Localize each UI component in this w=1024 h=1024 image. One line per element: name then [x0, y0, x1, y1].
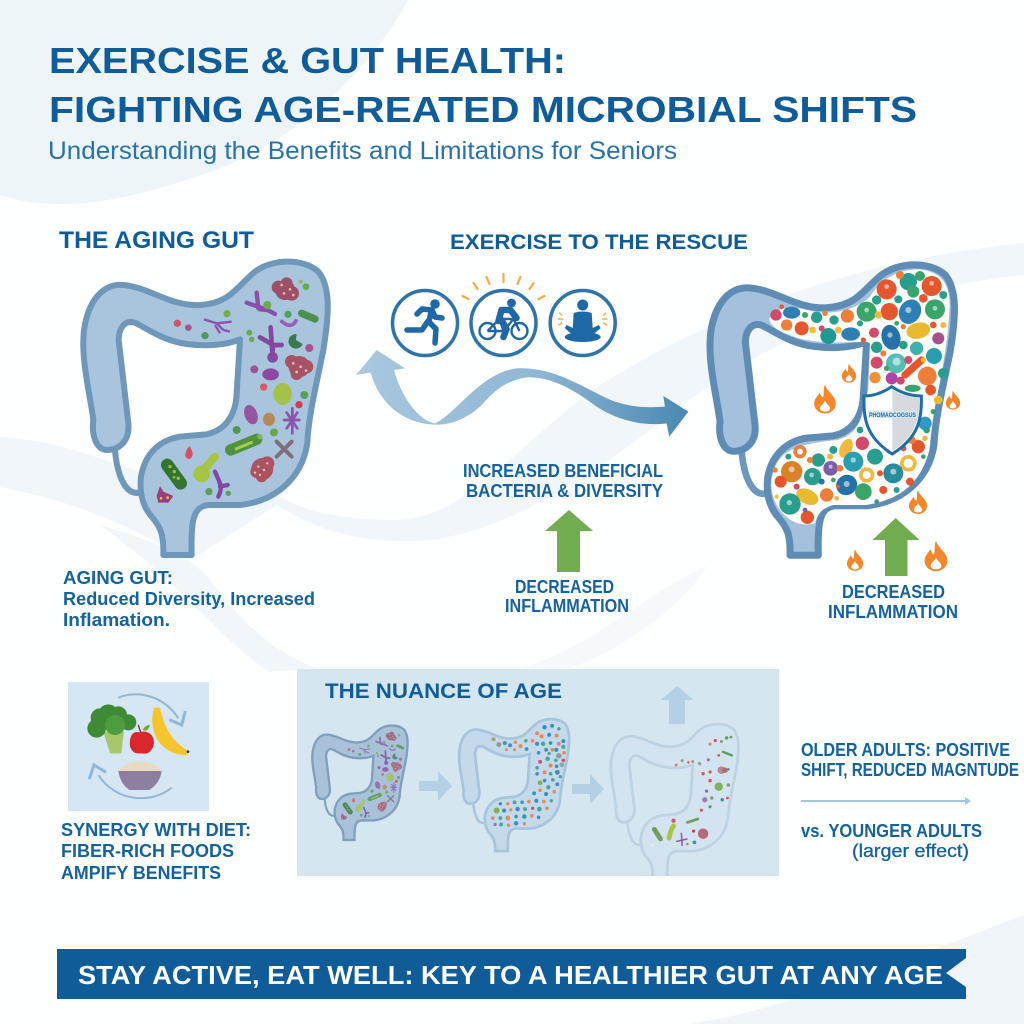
caption: aging gut: Reduced Diversity, Increased — [63, 589, 315, 609]
text: younger adults: vs. YOUNGER ADULTS — [801, 821, 982, 841]
arrow: step one — [419, 771, 452, 801]
arrow: green up centre — [545, 510, 593, 572]
caption: synergy with diet: AMPIFY BENEFITS — [61, 863, 221, 883]
caption: aging gut: AGING GUT: — [63, 568, 173, 588]
caption: aging gut: Inflamation. — [63, 610, 170, 630]
caption: synergy with diet: SYNERGY WITH DIET: — [61, 820, 251, 840]
small gut: aged — [312, 726, 408, 840]
icons: inflammation flames — [814, 363, 960, 571]
title — [49, 40, 917, 130]
arrow: ribbon cycling between guts — [356, 350, 688, 437]
illustration: aging gut with sparse microbes — [83, 262, 328, 555]
caption: aging gut — [63, 568, 315, 630]
caption: synergy with diet — [61, 820, 251, 883]
banner: STAY ACTIVE, EAT WELL: KEY TO A HEALTHIER GUT AT ANY AGE — [78, 960, 943, 990]
arrow: up — [661, 686, 694, 724]
text: younger adults: (larger effect) — [852, 841, 969, 861]
panel: the nuance of age — [297, 669, 779, 877]
arrow: step two — [572, 774, 604, 804]
arrow: green up right — [872, 518, 920, 576]
heading: the aging gut: THE AGING GUT — [59, 227, 254, 254]
title: EXERCISE & GUT HEALTH: — [49, 40, 566, 81]
caption: synergy with diet: FIBER-RICH FOODS — [61, 841, 234, 861]
icon: shield — [864, 387, 921, 454]
text: decreased inflammation right: INFLAMMATION — [828, 602, 958, 622]
text: decreased inflammation right — [828, 582, 958, 622]
subtitle: Understanding the Benefits and Limitations for Seniors — [48, 137, 677, 165]
panel: diet synergy food illustration — [68, 682, 209, 811]
text: increased beneficial bacteria: BACTERIA & DIVERSITY — [466, 481, 663, 501]
extra small microbes filling the gaps — [772, 271, 949, 512]
text: younger adults — [801, 821, 982, 861]
small gut: active — [459, 719, 569, 851]
heading: exercise to the rescue: EXERCISE TO THE RESCUE — [450, 231, 748, 254]
icon: runner — [392, 290, 458, 356]
small gut: faded — [610, 722, 740, 876]
heading: the nuance of age: THE NUANCE OF AGE — [325, 680, 562, 703]
title: FIGHTING AGE-REATED MICROBIAL SHIFTS — [49, 89, 917, 130]
arrow: comparison line — [801, 797, 971, 805]
icon: meditating person — [550, 290, 615, 356]
banner — [57, 949, 966, 999]
text: older adults — [801, 740, 1019, 780]
text: decreased inflammation right: DECREASED — [842, 582, 945, 602]
illustration: healthy gut with diverse microbes — [710, 265, 954, 555]
text: increased beneficial bacteria: INCREASED BENEFICIAL — [463, 461, 663, 481]
icon: shield: PHOMAOCOGSUS — [869, 412, 916, 419]
text: decreased inflammation centre — [505, 577, 629, 616]
text: decreased inflammation centre: INFLAMMATION — [505, 596, 629, 616]
text: increased beneficial bacteria — [463, 461, 663, 501]
text: decreased inflammation centre: DECREASED — [515, 577, 614, 597]
highlights inside larger microbes — [787, 281, 937, 505]
icon: cyclist with sun rays — [462, 274, 544, 356]
